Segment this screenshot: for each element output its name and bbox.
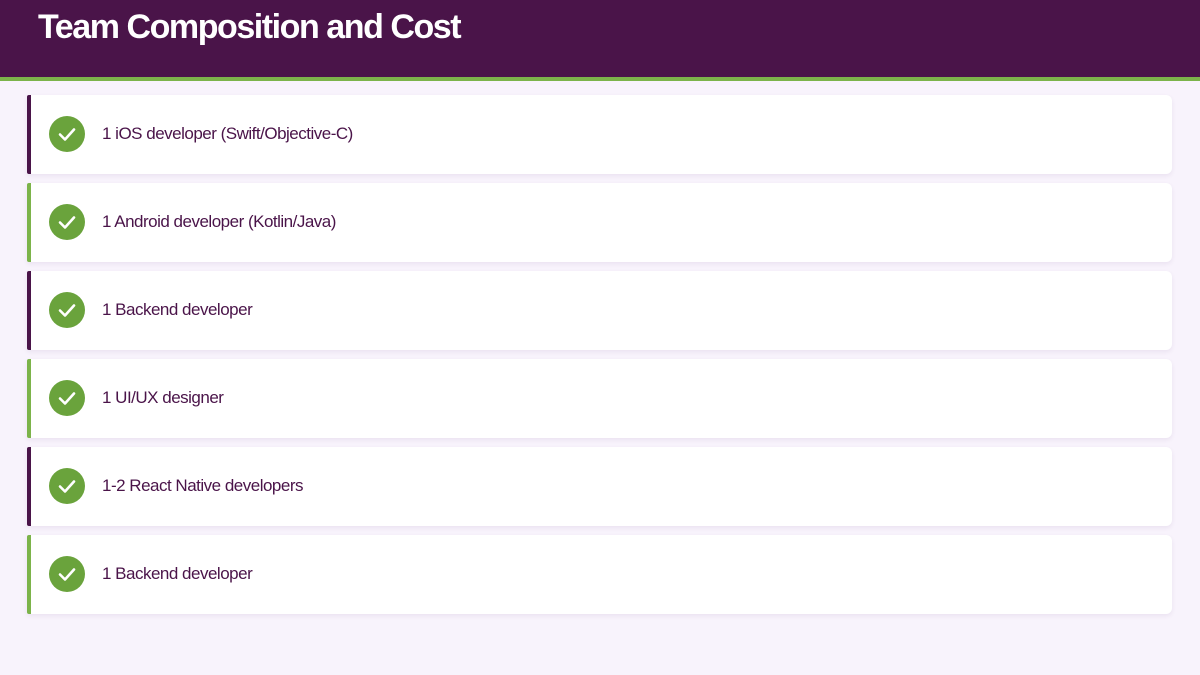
card: backend	[27, 271, 1172, 350]
icon: check	[49, 292, 85, 328]
card: iOS	[27, 95, 1172, 174]
text: 1 iOS developer (Swift/Objective-C)	[102, 124, 353, 143]
text: 1 Backend developer	[102, 300, 252, 319]
text: 1-2 React Native developers	[102, 476, 303, 495]
icon: check	[49, 468, 85, 504]
header	[0, 0, 1200, 81]
icon: check	[49, 380, 85, 416]
text: 1 Backend developer	[102, 564, 252, 583]
card: backend 2	[27, 535, 1172, 614]
icon: check	[49, 116, 85, 152]
text: 1 Android developer (Kotlin/Java)	[102, 212, 336, 231]
text: 1 UI/UX designer	[102, 388, 223, 407]
icon: check	[49, 204, 85, 240]
card: Android	[27, 183, 1172, 262]
title: Team Composition and Cost	[38, 8, 460, 46]
card: designer	[27, 359, 1172, 438]
card: react native	[27, 447, 1172, 526]
icon: check	[49, 556, 85, 592]
